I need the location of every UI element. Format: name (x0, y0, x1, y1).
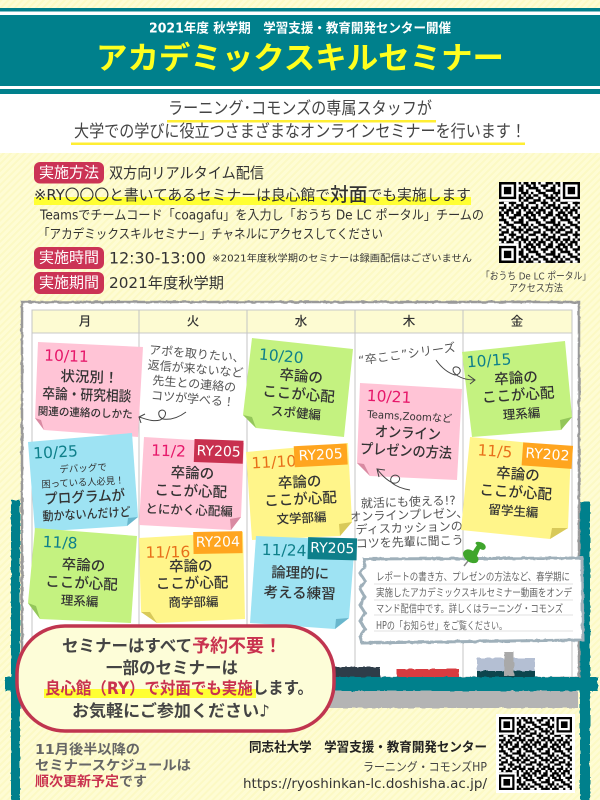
sticky note: 11/2 (139, 437, 244, 530)
annotation: job hunting: コツを先輩に聞こう (355, 533, 464, 551)
arrow: to 10/15 (436, 360, 475, 384)
note text: Teams,Zoomなど (366, 409, 453, 425)
annotation: job hunting: ディスカッションの (355, 518, 463, 537)
note text: 卒論の (279, 366, 324, 387)
calendar header: 水 (295, 314, 308, 328)
note text (260, 365, 338, 424)
note text (40, 460, 131, 524)
annotation: job hunting (349, 492, 469, 551)
note text: 考える練習 (263, 584, 336, 603)
note text: 卒論の (170, 464, 214, 483)
note text: ここが心配 (156, 573, 229, 593)
sticky note: 10/11 (35, 342, 143, 437)
period text: 2021年度秋学期 (109, 274, 224, 292)
intro text: ラーニング･コモンズの専属スタッフが (168, 99, 432, 119)
note text: 卒論の (169, 558, 213, 575)
note text: 状況別！ (60, 368, 119, 387)
recording note: ※2021年度秋学期のセミナーは録画配信はございません (212, 252, 472, 264)
annotation: Tuesday advice (145, 343, 245, 410)
note text: 卒論・研究相談 (42, 385, 132, 406)
QR caption: アクセス方法 (509, 282, 563, 294)
sticky note: 11/8 (28, 528, 137, 623)
method row (34, 162, 264, 184)
footer contact: 同志社大学 学習支援・教育開発センター (249, 740, 487, 756)
notice text (376, 570, 572, 632)
schedule note: 11月後半以降の (35, 741, 140, 758)
note text: 論理的に (271, 564, 329, 583)
note text: スポ健編 (270, 403, 322, 422)
callout: no reservation needed (17, 626, 334, 731)
note text: プレゼンの方法 (359, 440, 453, 462)
sticky note: 11/10 (246, 443, 352, 540)
footer contact: https://ryoshinkan-lc.doshisha.ac.jp/ (243, 776, 487, 792)
annotation: job hunting: 就活にも使える!? (361, 492, 456, 511)
date: 11/24 (262, 541, 307, 560)
sticky note: 10/21 (357, 383, 462, 480)
teal shelf (5, 677, 598, 691)
calendar header (32, 310, 572, 333)
note text (359, 409, 454, 462)
note text: ここが心配 (262, 382, 336, 406)
note text: ここが心配 (45, 572, 119, 594)
note text (155, 557, 229, 610)
icon: green push pin (463, 542, 486, 566)
schedule note (35, 741, 192, 790)
note text: 文学部編 (276, 509, 327, 527)
annotation: series: “卒ここ”シリーズ (357, 339, 456, 368)
note text: 卒論の (277, 473, 322, 492)
line 2: 一部のセミナーは (106, 658, 238, 678)
arrow: to 10/11 (139, 410, 186, 423)
date: 11/5 (477, 441, 513, 462)
on-demand notice box (360, 558, 583, 643)
room tag: RY205 (298, 446, 343, 465)
line 4: お気軽にご参加ください♪ (72, 700, 270, 720)
line 1: セミナーはすべて予約不要！ (62, 636, 282, 656)
footer contact (243, 740, 487, 792)
note text: 困っている人必見！ (41, 474, 125, 491)
room tag: RY204 (196, 534, 240, 551)
note text: 理系編 (61, 592, 99, 609)
line 3: 良心館（RY）で対面でも実施します。 (45, 678, 313, 698)
note text: 卒論の (496, 465, 540, 485)
note text (263, 472, 339, 527)
sticky note: 10/20 (243, 338, 353, 437)
period row (34, 272, 224, 294)
QR caption (481, 270, 591, 294)
note text (263, 564, 336, 603)
period label: 実施期間 (39, 274, 99, 292)
note text (480, 367, 557, 424)
annotation: Tuesday advice: コツが学べる！ (151, 387, 236, 410)
arrow: to 10/21 (377, 469, 410, 490)
in-person note: ※RY〇〇〇と書いてあるセミナーは良心館で対面でも実施します (34, 184, 471, 206)
time label: 実施時間 (39, 248, 99, 266)
calendar header: 月 (79, 314, 91, 328)
note text: 動かないんだけど (42, 504, 131, 524)
sticky note: 11/24 (250, 536, 357, 629)
date: 11/2 (151, 442, 186, 461)
note text: ここが心配 (154, 481, 228, 501)
time row (34, 247, 472, 269)
date: 11/16 (145, 543, 190, 562)
note text: 留学生編 (488, 502, 539, 520)
note text: 卒論の (61, 556, 106, 575)
annotation: job hunting: オンラインプレゼン、 (349, 506, 468, 524)
annotation: Tuesday advice: 返信が来ないなど (147, 357, 244, 380)
date: 10/25 (33, 442, 78, 463)
annotation: Tuesday advice: アポを取りたい、 (148, 343, 245, 365)
Teams instructions: Teamsでチームコード「coagafu」を入力し「おうち De LC ポータル」チームの (39, 208, 484, 224)
note text (145, 463, 234, 519)
date: 10/15 (466, 350, 512, 371)
note text: オンライン (374, 424, 441, 444)
method label: 実施方法 (39, 164, 99, 182)
note text (44, 555, 120, 610)
note text (38, 367, 134, 421)
note text: 関連の連絡のしかた (38, 404, 133, 421)
date: 10/20 (258, 345, 304, 367)
note text (478, 464, 554, 521)
header band (0, 8, 600, 153)
QR code: website (496, 714, 575, 793)
Teams instructions: 「アカデミックスキルセミナー」チャネルにアクセスしてください (38, 226, 383, 242)
Teams instructions (38, 208, 484, 242)
note text: デバッグで (59, 461, 107, 476)
sticky note: 10/25 (28, 433, 138, 532)
calendar header: 木 (403, 314, 416, 328)
notice text: HPの「お知らせ」をご覧ください。 (376, 619, 507, 632)
date: 11/10 (251, 452, 297, 472)
sticky note: 11/16 (139, 531, 245, 623)
room tag: RY205 (310, 540, 355, 557)
annotation: Tuesday advice: 先生との連絡の (152, 373, 237, 395)
main title: アカデミックスキルセミナー (96, 41, 504, 77)
books on shelf (333, 652, 535, 677)
note text: 卒論の (494, 369, 538, 389)
QR code: portal (499, 182, 580, 263)
schedule note: 順次更新予定です (35, 773, 147, 790)
room tag: RY205 (196, 443, 241, 461)
schedule note: セミナースケジュールは (35, 758, 192, 774)
method text: 双方向リアルタイム配信 (109, 164, 264, 182)
intro text: 大学での学びに役立つさまざまなオンラインセミナーを行います！ (74, 121, 526, 142)
note text: 理系編 (502, 405, 541, 423)
time text: 12:30-13:00 (109, 248, 206, 268)
calendar header: 火 (187, 314, 199, 328)
note text: ここが心配 (481, 383, 555, 406)
note text: ここが心配 (479, 480, 553, 504)
note text: プログラムが (44, 486, 126, 508)
note text: とにかく心配編 (145, 501, 233, 519)
intro text (71, 99, 526, 145)
sticky note: 11/5 (461, 437, 573, 539)
date: 10/11 (44, 346, 89, 366)
footer contact: ラーニング・コモンズHP (363, 759, 487, 774)
calendar paper (22, 302, 579, 678)
header subtitle: 2021年度 秋学期 学習支援・教育開発センター開催 (149, 20, 451, 36)
date: 11/8 (42, 533, 78, 553)
calendar header: 金 (511, 314, 524, 328)
date: 10/21 (366, 387, 412, 407)
room tag: RY202 (525, 446, 570, 465)
note text: ここが心配 (264, 488, 338, 510)
sticky note: 10/15 (462, 341, 572, 437)
note text: 商学部編 (168, 594, 219, 610)
teal frame (11, 500, 590, 800)
